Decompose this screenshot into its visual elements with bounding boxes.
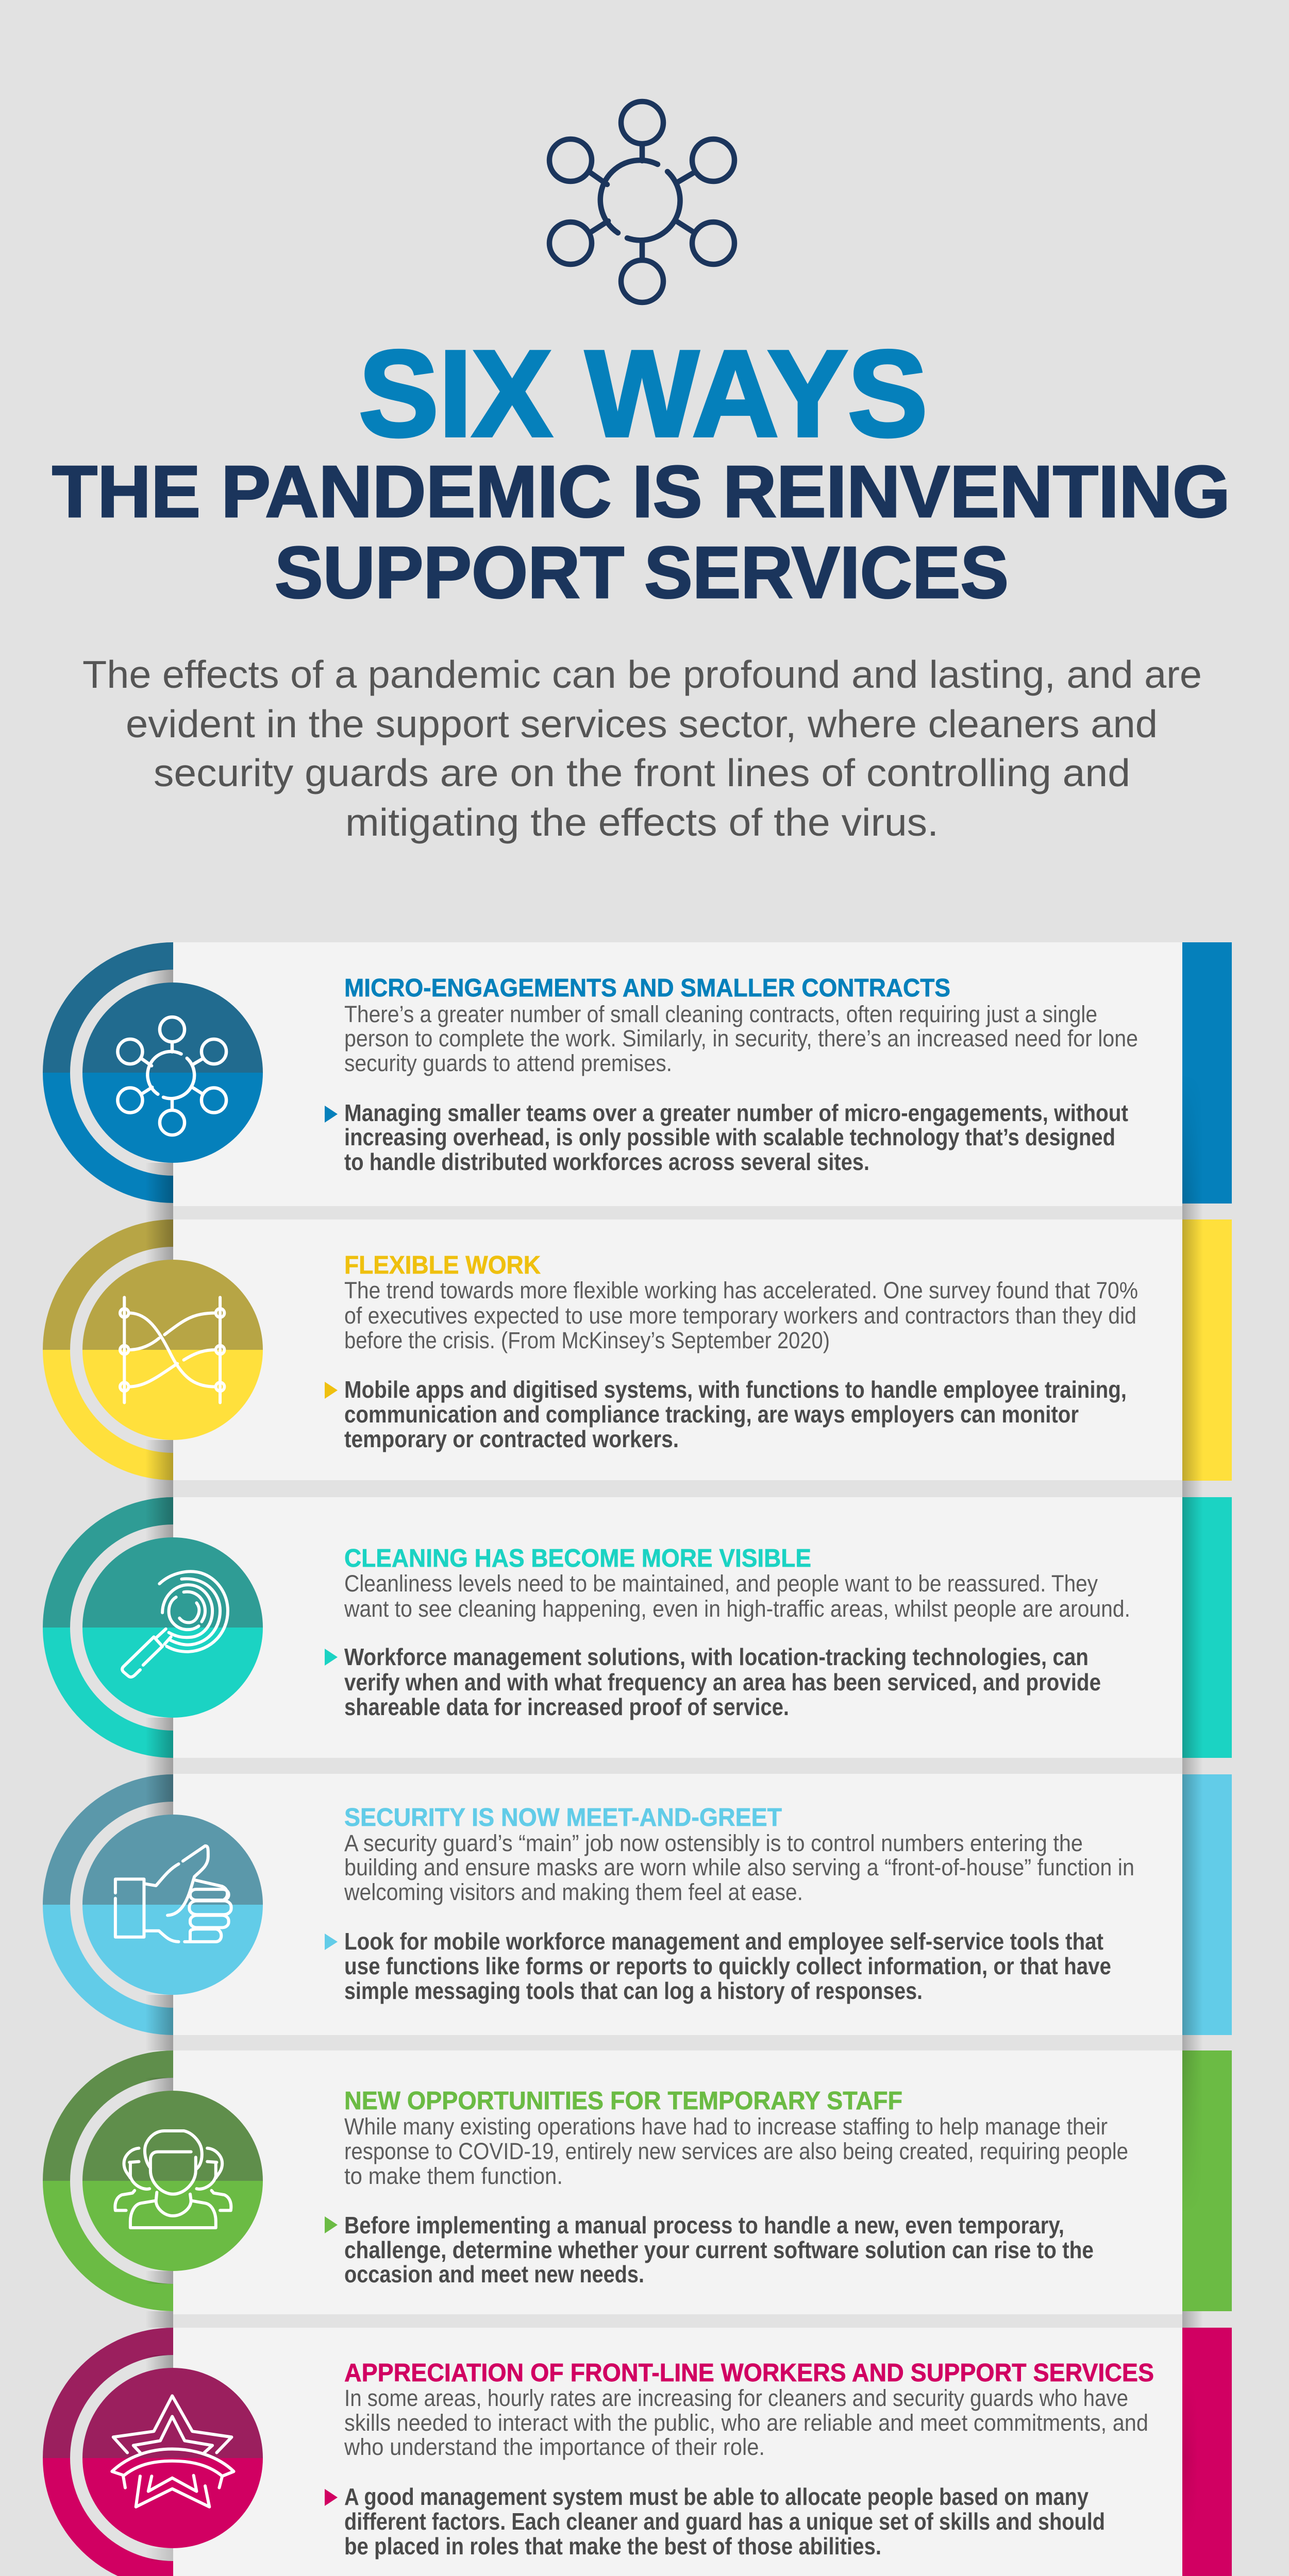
body text: There’s a greater number of small cleaning contracts, often requiring just a single (344, 1001, 1097, 1027)
icon: crossing lines (120, 1297, 224, 1403)
panel: flexible work (43, 1219, 1232, 1497)
callout: use functions like forms or reports to quickly collect information, or that have (344, 1953, 1111, 1979)
callout (344, 1099, 1128, 1175)
body text: who understand the importance of their role. (344, 2434, 765, 2460)
body text (344, 2385, 1148, 2460)
heading: CLEANING HAS BECOME MORE VISIBLE (344, 1545, 811, 1572)
heading: NEW OPPORTUNITIES FOR TEMPORARY STAFF (344, 2087, 902, 2115)
callout (344, 2483, 1105, 2560)
callout (344, 1643, 1101, 1720)
title: THE PANDEMIC IS REINVENTING (52, 451, 1230, 533)
panel: micro-engagements and smaller contracts (43, 942, 1232, 1219)
heading: MICRO-ENGAGEMENTS AND SMALLER CONTRACTS (344, 974, 950, 1002)
intro text: security guards are on the front lines of controlling and (154, 751, 1130, 794)
title: SUPPORT SERVICES (275, 532, 1009, 614)
body text: person to complete the work. Similarly, in security, there’s an increased need for lone (344, 1025, 1138, 1052)
body text (344, 1001, 1138, 1076)
body text: security guards to attend premises. (344, 1050, 672, 1076)
bullet arrow (325, 1934, 338, 1950)
body text: The trend towards more flexible working has accelerated. One survey found that 70% (344, 1277, 1138, 1303)
callout: temporary or contracted workers. (344, 1426, 679, 1452)
callout: Mobile apps and digitised systems, with functions to handle employee training, (344, 1376, 1127, 1403)
icon: star with banner (112, 2396, 234, 2507)
callout: increasing overhead, is only possible with scalable technology that’s designed (344, 1124, 1115, 1150)
callout: be placed in roles that make the best of those abilities. (344, 2533, 881, 2560)
intro text: mitigating the effects of the virus. (345, 801, 939, 844)
heading: FLEXIBLE WORK (344, 1251, 541, 1279)
callout: shareable data for increased proof of service. (344, 1693, 789, 1720)
intro text: The effects of a pandemic can be profound and lasting, and are (82, 653, 1202, 696)
heading: APPRECIATION OF FRONT-LINE WORKERS AND SUPPORT SERVICES (344, 2359, 1154, 2387)
intro text (82, 653, 1202, 844)
bullet arrow (325, 1649, 338, 1666)
callout: to handle distributed workforces across several sites. (344, 1148, 869, 1175)
icon: magnifier over fingerprint (122, 1571, 228, 1677)
body text: While many existing operations have had to increase staffing to help manage their (344, 2113, 1108, 2140)
body text: to make them function. (344, 2163, 563, 2189)
panel: appreciation of front-line workers and support services (43, 2328, 1232, 2576)
body text: before the crisis. (From McKinsey’s September 2020) (344, 1327, 830, 1353)
callout (344, 1376, 1127, 1452)
body text (344, 1830, 1134, 1905)
callout: occasion and meet new needs. (344, 2261, 644, 2287)
icon: thumbs up (115, 1846, 231, 1942)
body text: Cleanliness levels need to be maintained, and people want to be reassured. They (344, 1570, 1098, 1597)
icon: network hub (549, 101, 734, 302)
heading: SECURITY IS NOW MEET-AND-GREET (344, 1804, 782, 1832)
panel: security is now meet-and-greet (43, 1774, 1232, 2050)
callout: different factors. Each cleaner and guard has a unique set of skills and should (344, 2508, 1105, 2535)
callout: simple messaging tools that can log a history of responses. (344, 1977, 923, 2004)
body text: building and ensure masks are worn while also serving a “front-of-house” function in (344, 1854, 1134, 1880)
callout: challenge, determine whether your current software solution can rise to the (344, 2236, 1094, 2263)
callout: Look for mobile workforce management and employee self-service tools that (344, 1928, 1103, 1955)
body text (344, 1277, 1138, 1353)
callout (344, 1928, 1111, 2004)
body text: of executives expected to use more temporary workers and contractors than they did (344, 1302, 1136, 1329)
callout: A good management system must be able to allocate people based on many (344, 2483, 1089, 2510)
intro text: evident in the support services sector, where cleaners and (126, 702, 1158, 745)
callout: communication and compliance tracking, are ways employers can monitor (344, 1401, 1079, 1428)
bullet arrow (325, 2489, 338, 2506)
body text: want to see cleaning happening, even in high-traffic areas, whilst people are around. (344, 1596, 1130, 1622)
body text: response to COVID-19, entirely new services are also being created, requiring people (344, 2138, 1128, 2164)
callout: Managing smaller teams over a greater number of micro-engagements, without (344, 1099, 1128, 1126)
callout (344, 2212, 1094, 2287)
title: SIX WAYS (359, 326, 928, 462)
callout: verify when and with what frequency an area has been serviced, and provide (344, 1669, 1101, 1696)
panel: cleaning has become more visible (43, 1497, 1232, 1774)
bullet arrow (325, 1106, 338, 1123)
body text: welcoming visitors and making them feel at ease. (344, 1879, 803, 1905)
body text: A security guard’s “main” job now ostensibly is to control numbers entering the (344, 1830, 1083, 1856)
bullet arrow (325, 1382, 338, 1399)
icon: network hub (118, 1017, 226, 1135)
body text: skills needed to interact with the public, who are reliable and meet commitments, and (344, 2410, 1148, 2436)
title (52, 326, 1230, 614)
body text (344, 2113, 1128, 2189)
body text: In some areas, hourly rates are increasing for cleaners and security guards who have (344, 2385, 1128, 2411)
panel: new opportunities for temporary staff (43, 2050, 1232, 2328)
bullet arrow (325, 2216, 338, 2233)
callout: Before implementing a manual process to handle a new, even temporary, (344, 2212, 1064, 2239)
body text (344, 1570, 1130, 1622)
callout: Workforce management solutions, with location-tracking technologies, can (344, 1643, 1089, 1670)
icon: group of people (115, 2131, 231, 2228)
